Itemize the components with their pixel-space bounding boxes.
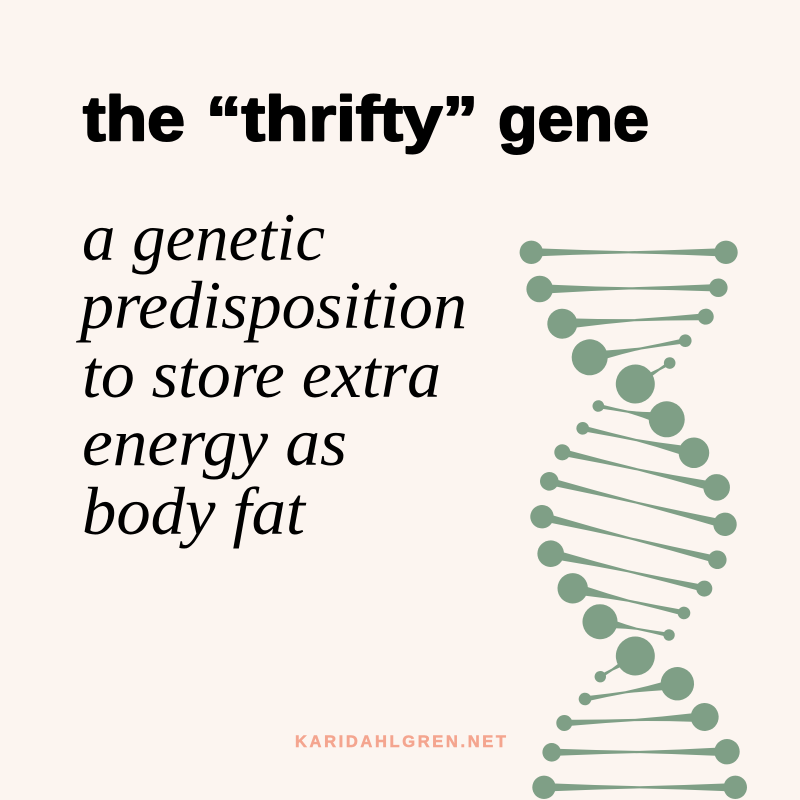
helix rung 9 bbox=[537, 468, 739, 538]
helix rung 3 bbox=[547, 301, 714, 339]
helix rung 4 bbox=[569, 322, 695, 378]
helix rung 14 bbox=[585, 629, 662, 696]
definition text block: energy as bbox=[82, 404, 347, 480]
helix rung 18 bbox=[532, 776, 747, 799]
helix rung 11 bbox=[535, 538, 715, 603]
definition text block bbox=[76, 199, 467, 549]
title: gene bbox=[498, 84, 649, 154]
helix rung 1 bbox=[520, 241, 738, 264]
helix rung 5 bbox=[608, 343, 685, 411]
website credit: KARIDAHLGREN.NET bbox=[295, 733, 506, 751]
definition text block: body fat bbox=[82, 473, 307, 549]
helix rung 7 bbox=[573, 412, 712, 471]
helix rung 13 bbox=[580, 601, 678, 653]
title: “thrifty” bbox=[206, 84, 478, 154]
definition text block: a genetic bbox=[82, 199, 325, 275]
definition text block: predisposition bbox=[76, 267, 467, 343]
helix rung 16 bbox=[556, 702, 719, 737]
definition text block: to store extra bbox=[82, 336, 441, 412]
helix rung 15 bbox=[576, 665, 697, 717]
title: the bbox=[83, 84, 185, 154]
dna helix illustration bbox=[520, 241, 747, 799]
title bbox=[83, 84, 649, 154]
helix rung 12 bbox=[555, 570, 693, 629]
helix rung 8 bbox=[552, 438, 733, 503]
helix rung 10 bbox=[528, 503, 729, 573]
helix rung 6 bbox=[589, 387, 688, 440]
helix rung 17 bbox=[542, 739, 740, 765]
helix rung 2 bbox=[526, 274, 728, 302]
